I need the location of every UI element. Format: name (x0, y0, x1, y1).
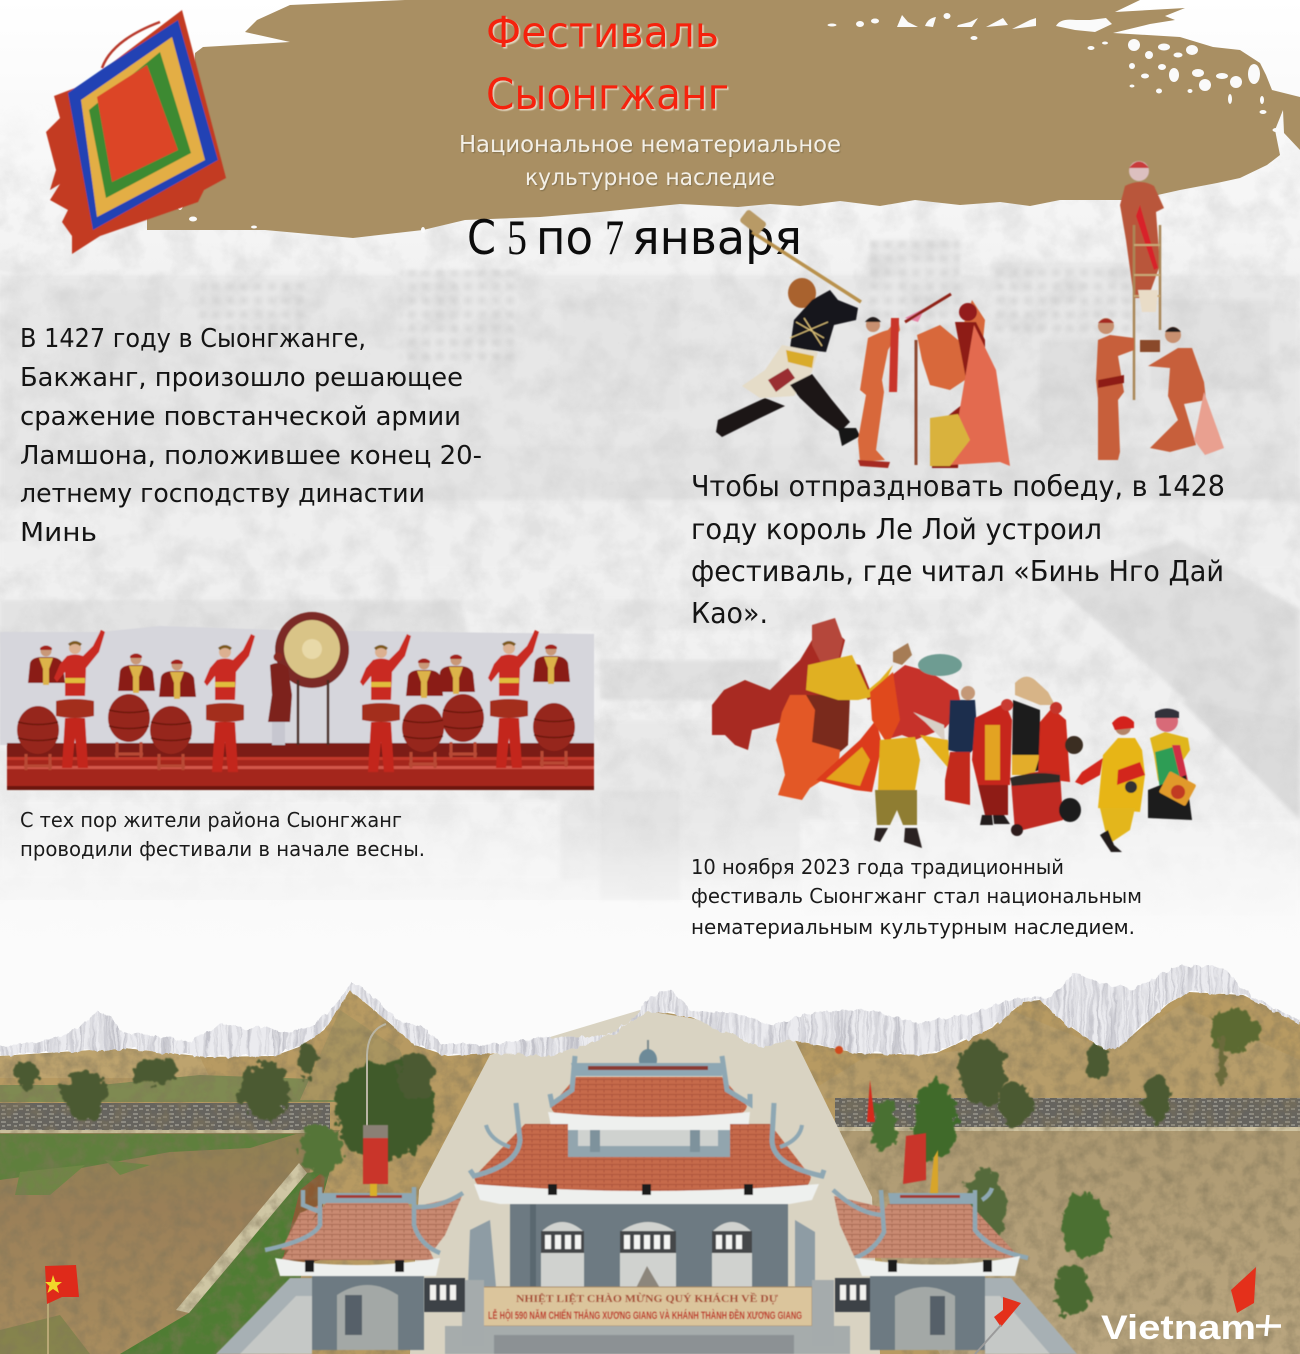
caption: national intangible heritage 2023: фестиваль Сыонгжанг стал национальным (691, 884, 1142, 908)
title: Фестиваль (486, 8, 719, 58)
banner with Vietnamese greeting: LỄ HỘI 590 NĂM CHIẾN THẮNG XƯƠNG GIANG VÀ KHÁNH THÀNH ĐỀN XƯƠNG GIANG (488, 1309, 802, 1322)
landscape: hills, fields and stone walls (0, 985, 1300, 1354)
banner with Vietnamese greeting (482, 1287, 812, 1326)
banner with Vietnamese greeting: NHIỆT LIỆT CHÀO MỪNG QUÝ KHÁCH VỀ DỰ (516, 1292, 779, 1305)
pavilion: left side building (216, 1187, 463, 1354)
date heading: 7 (605, 209, 624, 265)
temple: central gate with tiled roofs (424, 1040, 873, 1354)
icon: Vietnamese flag with yellow star (45, 1265, 79, 1354)
date heading: 5 (507, 209, 527, 265)
date heading: С (467, 211, 496, 266)
paragraph: victory celebration of 1428: году король Ле Лой устроил (691, 513, 1102, 546)
gate pillars and arches (468, 1204, 815, 1288)
main roof (470, 1103, 824, 1204)
title: Сыонгжанг (486, 70, 729, 120)
paragraph: battle of 1427: В 1427 году в Сыонгжанге, (20, 324, 366, 354)
green verge and pale footpath (120, 1163, 330, 1354)
icon: red, blue, gold and green festival flag (46, 10, 226, 254)
caption: national intangible heritage 2023: 10 ноября 2023 года традиционный (691, 855, 1064, 879)
torn paper edge above the landscape (0, 960, 1300, 1060)
photo: drummers on a red stage with a large gong (0, 612, 594, 790)
pavilion: right side building (833, 1188, 1077, 1354)
date heading: по (536, 211, 593, 266)
photo: lion and dragon dance procession (712, 618, 1196, 852)
red banners and flags around the temple (363, 1046, 938, 1196)
subtitle: Национальное нематериальное (459, 132, 841, 158)
paragraph: victory celebration of 1428: Чтобы отпраздновать победу, в 1428 (691, 470, 1225, 503)
steps and balustrade (424, 1278, 873, 1354)
upper roof of main gate (548, 1040, 750, 1157)
title (486, 8, 729, 120)
subtitle (459, 132, 841, 191)
paragraph: victory celebration of 1428 (691, 470, 1225, 630)
caption: national intangible heritage 2023 (691, 855, 1142, 939)
logo: Vietnam+: Vietnam (1101, 1309, 1256, 1347)
performers: warrior with mallet and orange-robed actors (716, 161, 1224, 468)
paragraph: battle of 1427 (20, 324, 482, 548)
paragraph: victory celebration of 1428: фестиваль, где читал «Бинь Нго Дай (691, 555, 1224, 588)
paragraph: battle of 1427: сражение повстанческой армии (20, 402, 461, 432)
caption: spring festivals: проводили фестивали в начале весны. (20, 837, 425, 861)
paragraph: battle of 1427: Минь (20, 518, 97, 548)
road leading to the temple (410, 1010, 880, 1354)
brown painted header band (147, 0, 1300, 238)
icon: red waving flags (975, 1267, 1256, 1354)
subtitle: культурное наследие (525, 165, 775, 191)
paragraph: battle of 1427: Ламшона, положившее конец 20- (20, 441, 482, 471)
caption: national intangible heritage 2023: нематериальным культурным наследием. (691, 915, 1135, 939)
paragraph: battle of 1427: летнему господству династии (20, 479, 425, 509)
caption: spring festivals (20, 808, 425, 861)
date heading (467, 209, 802, 266)
date heading: января (632, 211, 802, 266)
paragraph: victory celebration of 1428: Као». (691, 597, 768, 630)
paragraph: battle of 1427: Бакжанг, произошло решающее (20, 363, 463, 393)
caption: spring festivals: С тех пор жители района Сыонгжанг (20, 808, 402, 832)
background: faded city and temple photo (0, 148, 1300, 898)
